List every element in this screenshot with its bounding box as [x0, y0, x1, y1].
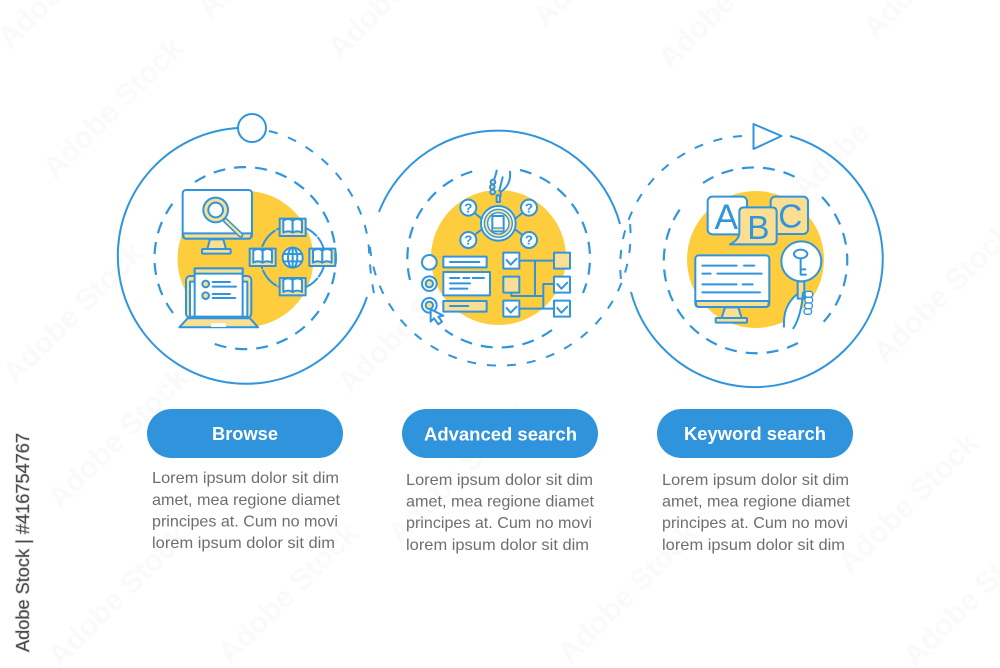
icon: hub with question nodes: ? [525, 200, 533, 215]
icon: hub with question nodes: ? [525, 233, 533, 248]
arrow: play triangle marker [754, 124, 782, 149]
yellow disc: keyword search [687, 191, 824, 328]
watermark pattern: Adobe Stock [382, 397, 535, 550]
text block: Advanced search description [406, 472, 595, 554]
inner dashed ring: keyword search [664, 167, 847, 353]
outer ring: advanced search [370, 131, 631, 366]
icon: hub with question nodes: ? [464, 233, 472, 248]
text block: Browse description: amet, mea regione diamet [152, 492, 341, 509]
inner dashed ring: browse [154, 167, 336, 349]
icon: hub with question nodes [460, 200, 537, 248]
icon: A B C speech bubbles: B [747, 210, 769, 247]
text block: Advanced search description: principes at. Cum no movi [406, 515, 592, 532]
icon: checkbox flowchart [503, 253, 570, 317]
outer ring: keyword search [620, 136, 883, 387]
icon: globe with four books [250, 219, 335, 295]
text block: Keyword search description: Lorem ipsum dolor sit dim [662, 472, 849, 489]
panel: advanced search circle [370, 131, 631, 366]
watermark pattern: Adobe Stock [0, 237, 150, 390]
watermark pattern: Adobe Stock [37, 32, 190, 185]
watermark pattern: Adobe Stock [832, 427, 985, 580]
text block: Keyword search description: principes at. Cum no movi [662, 515, 848, 532]
icons: keyword search [695, 197, 821, 328]
text block: Browse description: Lorem ipsum dolor sit dim [152, 470, 339, 487]
inner dashed ring: advanced search [407, 170, 590, 348]
outer ring: browse [118, 128, 376, 384]
heading pill: Advanced search [402, 409, 598, 458]
icon: hand holding key in magnifier [781, 241, 821, 328]
icons: browse [179, 190, 335, 327]
yellow disc: browse [178, 191, 314, 327]
watermark pattern: Adobe Stock [552, 517, 705, 668]
yellow disc: advanced search [431, 190, 566, 325]
text block: Browse description: lorem ipsum dolor sit dim [152, 535, 335, 552]
text block: Keyword search description: amet, mea regione diamet [662, 494, 851, 510]
text block: Advanced search description: amet, mea regione diamet [406, 494, 595, 510]
watermark pattern: Adobe Stock [332, 247, 485, 400]
text block: Advanced search description: lorem ipsum dolor sit dim [406, 537, 589, 554]
icon: A B C speech bubbles [708, 197, 808, 247]
icon: monitor with text lines [695, 255, 769, 323]
stock id side label: Adobe Stock | #416754767 [13, 433, 33, 652]
text block: Keyword search description: lorem ipsum dolor sit dim [662, 537, 845, 554]
heading pill: Browse [147, 409, 343, 458]
watermark pattern: Adobe Stock [42, 362, 195, 515]
icon: A B C speech bubbles: C [778, 198, 802, 235]
progress marker circle [238, 114, 266, 142]
icons: advanced search [422, 171, 570, 324]
text block: Browse description: principes at. Cum no movi [152, 514, 338, 530]
text block: Advanced search description: Lorem ipsum dolor sit dim [406, 472, 593, 489]
icon: A B C speech bubbles: A [715, 198, 739, 237]
panel: keyword search circle [620, 124, 883, 387]
heading pill: Browse: Browse [212, 424, 278, 444]
icon: laptop with document [179, 268, 258, 327]
icon: desktop monitor with magnifier [183, 190, 252, 254]
icon: radio options with form fields [422, 255, 490, 324]
icon: hub with question nodes: ? [464, 200, 472, 215]
text block: Keyword search description [662, 472, 851, 554]
heading pill: Advanced search: Advanced search [424, 424, 577, 444]
heading pill: Keyword search: Keyword search [684, 424, 826, 444]
watermark pattern: Adobe [787, 116, 876, 205]
watermark pattern: Adobe Stock [212, 517, 365, 668]
panel: browse circle [118, 114, 376, 384]
icon: hand holding pendant [490, 171, 510, 202]
heading pill: Keyword search [657, 409, 853, 458]
text block: Browse description [152, 470, 341, 552]
